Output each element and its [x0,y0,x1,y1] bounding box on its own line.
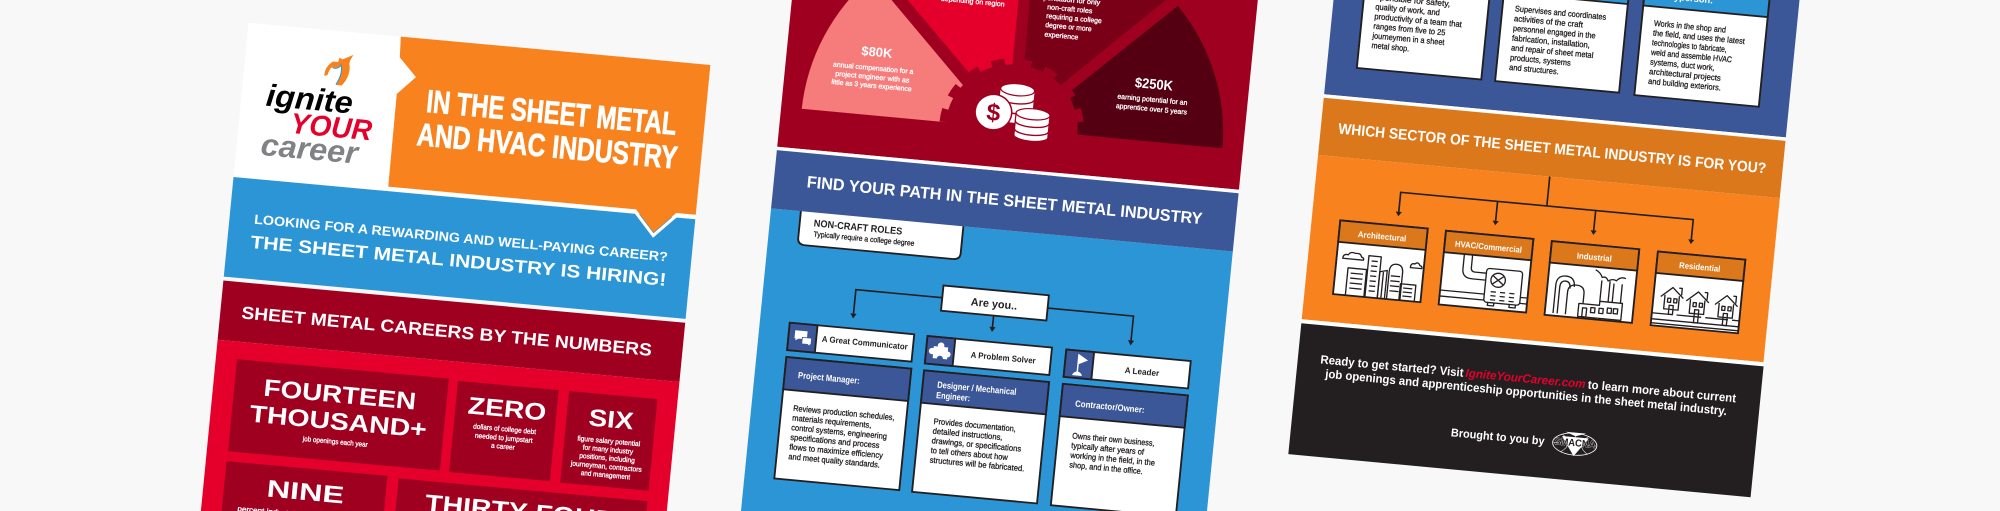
sector card: industrial: Industrial [1576,251,1612,264]
question box: are you [941,285,1049,320]
card: journeyperson: systems, duct work, [1650,57,1715,72]
card: project manager [774,357,911,490]
card: project manager: Reviews production schedules, [793,403,895,422]
poster panel: careers by the numbers [188,23,710,511]
heading band: sheet metal careers by the numbers: SHEET METAL CAREERS BY THE NUMBERS [241,303,653,360]
icon: city skyline [1339,252,1423,302]
panel: orange sectors [1302,155,1780,362]
card: superintendent: products, systems [1510,52,1571,68]
card: project manager: specifications and process [790,432,880,450]
card: designer / mechanical engineer: Provides documentation, [933,416,1016,434]
card: project manager: materials requirements, [792,413,872,430]
card: foreman [1357,0,1494,80]
logo: ignite your career: career [259,126,361,171]
panel: orange title speech bubble: IN THE SHEET METAL [425,84,678,142]
stat: thirty-four [387,478,648,511]
wedge: non-craft roles [1016,0,1187,143]
heading band: which sector [1318,98,1785,198]
panel: orange title speech bubble [384,37,710,239]
panel: black footer: Brought to you by [1450,426,1546,448]
heading band: find your path [771,150,1239,251]
icon: stack of coins with dollar [972,80,1053,143]
wedge: regional pay [869,0,1027,128]
sector card: hvac/commercial [1439,231,1533,313]
card: project manager: Project Manager: [798,370,860,386]
wedge: non-craft roles: non-craft roles [1047,3,1093,15]
panel: black footer [1288,323,1764,497]
wedge: $80K: little as 3 years experience [831,78,912,93]
card: superintendent: personnel engaged in the [1513,23,1596,40]
trait: a great communicator [787,323,914,362]
trait: a great communicator: A Great Communicator [821,334,909,352]
trait: a leader [1064,349,1191,388]
card: foreman: quality of work, and [1375,2,1441,17]
stat: fourteen thousand+: THOUSAND+ [248,401,428,444]
card: contractor/owner [1051,384,1188,511]
panel: intro blue band: THE SHEET METAL INDUSTRY IS HIRING! [250,231,667,290]
wedge: $250K: earning potential for an [1117,93,1188,107]
card: superintendent: fabrication, installation, [1512,33,1590,50]
trait: a problem solver [925,336,1052,375]
flow connectors: are you [850,289,1137,346]
wedge: $250K: apprentice over 5 years [1116,102,1188,117]
card: project manager: flows to maximize efficiency [789,442,884,460]
icon: three houses [1651,286,1742,331]
wedge: $80K: annual compensation for a [833,61,914,76]
panel: black footer: IgniteYourCareer.com [1465,366,1586,391]
logo: ignite your career: ignite [265,77,355,120]
sector card: architectural: Architectural [1357,229,1407,244]
callout: non-craft roles: Typically require a college degree [813,230,915,248]
sector card: residential: Residential [1679,260,1721,274]
card: contractor/owner: Contractor/Owner: [1075,399,1145,415]
wedge: $80K: $80K [861,43,894,61]
panel: black footer: job openings and apprenticeship opportunities in the sheet metal industry. [1324,367,1728,418]
logo: smacna: SMACNA [1554,436,1596,451]
sector card: residential [1651,251,1745,333]
card: journeyperson: architectural projects [1649,66,1721,83]
stat: six: figure salary potential [577,435,641,448]
stat: nine [215,461,387,511]
card: journeyperson: technologies to fabricate, [1652,37,1727,54]
stat: zero: ZERO [467,393,547,426]
wedge: $80K [801,0,1016,131]
panel: numbers grid [188,340,679,511]
sector card: architectural [1333,220,1428,302]
card: journeyperson: weld and assemble HVAC [1650,47,1733,64]
trait: a leader: A Leader [1124,365,1160,378]
card: journeyperson: and building exteriors. [1648,76,1721,93]
stat: zero: a career [491,442,516,452]
callout: non-craft roles [798,209,964,260]
wedge: $250K [1023,0,1236,148]
stat: fourteen thousand+: FOURTEEN [262,375,417,415]
stat: fourteen thousand+: job openings each year [302,435,369,449]
callout: non-craft roles: NON-CRAFT ROLES [813,219,903,238]
question box: are you: Are you.. [970,297,1018,313]
card: superintendent: activities of the craft [1514,13,1584,29]
card: foreman: ranges from five to 25 [1373,21,1446,37]
sector card: hvac/commercial: HVAC/Commercial [1455,239,1522,255]
flow connectors: sectors [1395,163,1699,244]
stat: six [560,391,658,491]
stat: six: positions, including [579,452,635,465]
card: designer / mechanical engineer [912,370,1049,503]
card: project manager: and meet quality standards. [788,451,880,470]
icon: factory [1553,266,1627,320]
heading band: sheet metal careers by the numbers [218,281,685,382]
wedge: $80K: project engineer with as [835,70,910,85]
card: contractor/owner: working in the field, in the [1069,450,1156,468]
stat: fourteen thousand+ [228,359,449,471]
card: designer / mechanical engineer: Designer / Mechanical [937,380,1017,397]
card: designer / mechanical engineer: drawings, or specifications [931,435,1022,454]
card: journeyperson: Works in the shop and [1654,18,1727,35]
stat: six: SIX [587,405,636,435]
wedge: non-craft roles: degree or more [1045,21,1092,33]
stat: six: and management [580,469,631,481]
card: superintendent: Supervises and coordinates [1515,3,1607,22]
poster panel: craft roles, sectors and footer [1288,0,1812,497]
stat: nine: NINE [266,476,345,509]
wedge: non-craft roles: requiring a college [1046,12,1102,25]
stat: zero: dollars of college debt [473,423,536,436]
card: superintendent [1495,0,1632,93]
panel: black footer: Ready to get started? Visit [1320,353,1464,380]
card: journeyperson: the field, and uses the latest [1653,28,1746,46]
icon: gear [937,56,1086,200]
card: superintendent: and repair of sheet metal [1511,42,1594,60]
logo: smacna [1551,431,1598,458]
panel: intro blue band [224,177,695,319]
card: foreman: metal shop. [1371,40,1410,53]
card: designer / mechanical engineer: to tell others about how [930,445,1009,462]
card: superintendent: and structures. [1509,62,1559,76]
card: foreman: productivity of a team that [1374,11,1463,29]
card: journeyperson [1633,0,1772,107]
card: contractor/owner: shop, and in the office. [1069,460,1143,476]
card: project manager: control systems, engineering [791,422,888,441]
panel: intro blue band: LOOKING FOR A REWARDING AND WELL-PAYING CAREER? [254,212,668,264]
trait: a problem solver: A Problem Solver [970,350,1037,366]
logo: ignite your career [259,47,380,172]
card: foreman: journeymen in a sheet [1371,30,1446,47]
icon: stack of coins with dollar: $ [985,99,1002,127]
panel: blue career paths area [708,206,1233,511]
stat: zero: needed to jumpstart [475,432,533,445]
card: contractor/owner: typically after years of [1071,440,1145,457]
stat: six: for many industry [582,444,634,456]
card: designer / mechanical engineer: Engineer: [936,390,971,403]
card: designer / mechanical engineer: detailed instructions, [932,426,1003,442]
wedge: $250K: $250K [1134,75,1174,95]
wedge: non-craft roles: experience [1044,31,1079,42]
heading band: which sector: WHICH SECTOR OF THE SHEET METAL INDUSTRY IS FOR YOU? [1337,121,1767,177]
sector card: industrial [1545,241,1639,323]
panel: earnings fan chart [775,0,1265,216]
heading band: find your path: FIND YOUR PATH IN THE SHEET METAL INDUSTRY [806,173,1203,228]
logo: ignite your career: YOUR [289,107,374,147]
stat: six: journeyman, contractors [569,460,643,474]
poster panel: pay fan and find your path [708,0,1265,511]
panel: orange title speech bubble: AND HVAC INDUSTRY [415,117,679,176]
card: contractor/owner: Owns their own business, [1072,431,1155,448]
stat: zero [449,381,559,481]
card: designer / mechanical engineer: structures will be fabricated. [929,455,1025,473]
panel: navy craft roles [1324,0,1812,137]
icon: hvac unit and duct [1439,252,1531,309]
panel: black footer: to learn more about current [1587,378,1737,405]
